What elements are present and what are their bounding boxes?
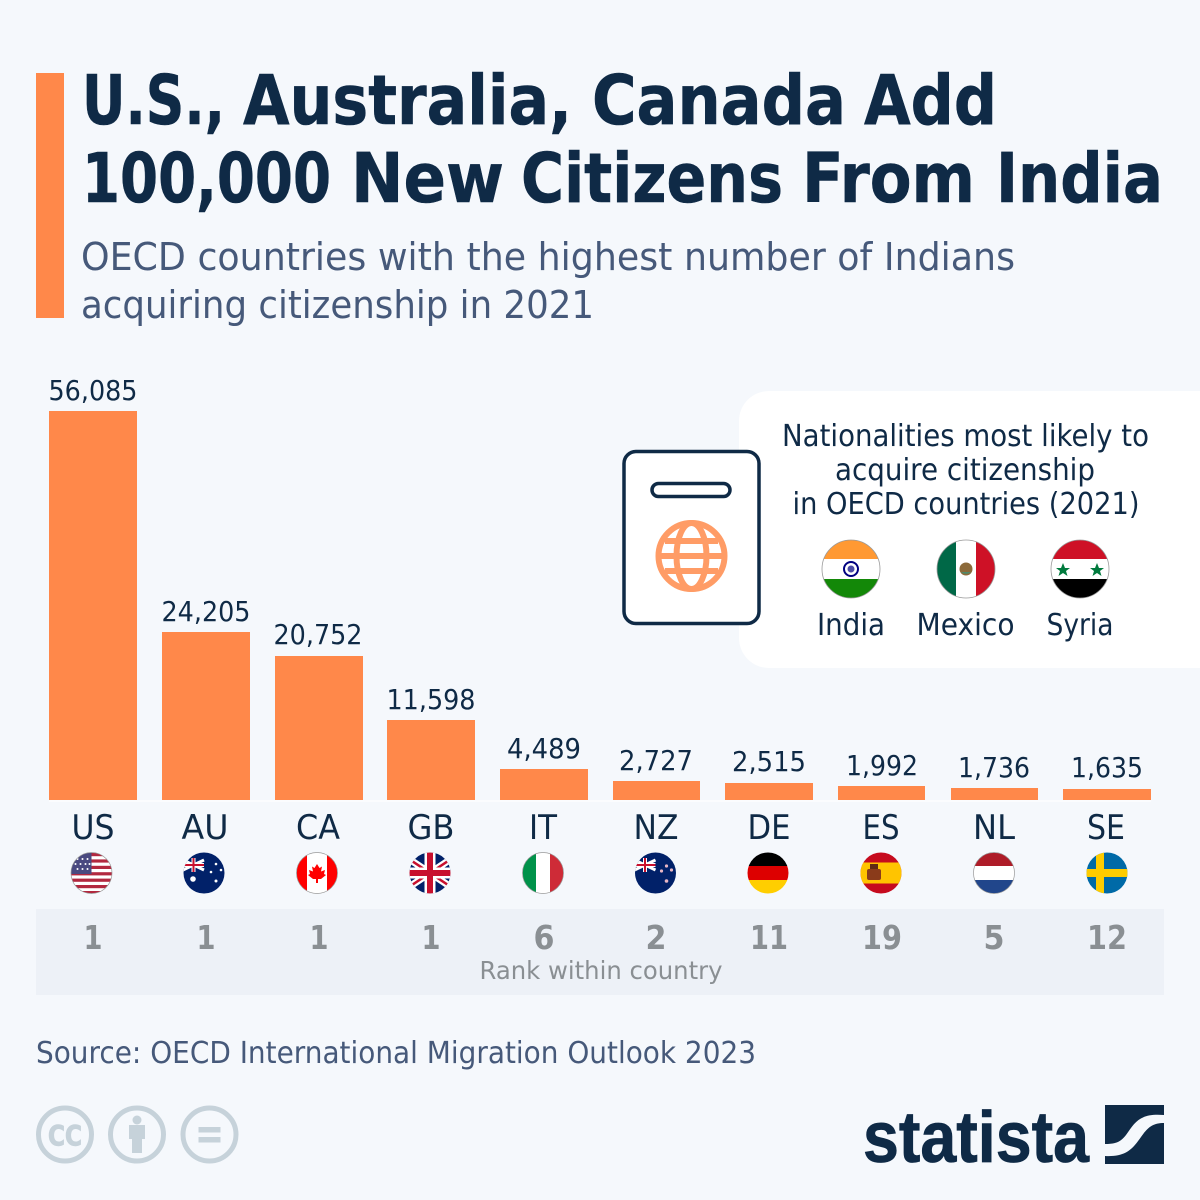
title: Add xyxy=(864,61,997,141)
flag labels: India xyxy=(817,608,885,643)
rank numbers: 2 xyxy=(646,918,666,957)
panel heading: Nationalities most likely to xyxy=(782,419,1149,454)
bars xyxy=(49,411,1151,800)
value labels: 1,992 xyxy=(846,750,918,782)
value labels: 1,736 xyxy=(958,752,1030,784)
value labels: 4,489 xyxy=(507,733,581,765)
title xyxy=(82,61,1163,219)
icon: statista mark xyxy=(1105,1105,1164,1164)
title: From xyxy=(802,139,975,219)
title: Canada xyxy=(592,61,846,141)
flag: US xyxy=(70,852,112,894)
country codes: SE xyxy=(1087,808,1125,848)
flag: India xyxy=(821,539,881,599)
value labels: 24,205 xyxy=(162,596,250,628)
icon: passport xyxy=(624,452,759,624)
flag: Sweden xyxy=(1086,852,1128,894)
title: Citizens xyxy=(521,139,783,219)
flag: Syria xyxy=(1050,539,1110,599)
flag labels: Mexico xyxy=(916,608,1014,643)
flag: New Zealand xyxy=(634,852,676,894)
value labels: 56,085 xyxy=(48,375,138,407)
value labels: 1,635 xyxy=(1071,752,1143,784)
rank numbers: 11 xyxy=(750,918,788,957)
country codes: NL xyxy=(973,808,1015,848)
country codes: DE xyxy=(748,808,790,848)
panel heading: in OECD countries (2021) xyxy=(792,487,1140,522)
flag: Canada xyxy=(296,852,338,894)
rank numbers xyxy=(84,918,1127,957)
title: U.S., xyxy=(82,61,225,141)
title accent bar xyxy=(36,73,64,318)
title: New xyxy=(351,139,504,219)
rank numbers: 19 xyxy=(862,918,902,957)
rank numbers: 1 xyxy=(196,918,216,957)
title: India xyxy=(996,139,1163,219)
flag: Australia xyxy=(183,852,225,894)
value labels: 2,727 xyxy=(619,745,693,777)
icon: creative commons xyxy=(38,1108,236,1161)
flag: Germany xyxy=(747,852,789,894)
baseline xyxy=(49,800,1151,802)
rank numbers: 12 xyxy=(1087,918,1127,957)
country codes: AU xyxy=(182,808,228,848)
source: Source: OECD International Migration Outlook 2023 xyxy=(36,1036,756,1071)
rank numbers: 1 xyxy=(310,918,328,957)
subtitle: OECD countries with the highest number of Indians xyxy=(81,235,1015,279)
icon: creative commons: CC xyxy=(48,1119,82,1152)
title: 100,000 xyxy=(82,139,331,219)
rank panel xyxy=(36,909,1164,995)
panel heading xyxy=(782,419,1149,522)
flag labels xyxy=(817,608,1114,643)
rank numbers: 1 xyxy=(84,918,102,957)
icon: globe xyxy=(658,523,724,589)
country codes: CA xyxy=(296,808,340,848)
logo: statista: statista xyxy=(863,1098,1090,1178)
panel heading: acquire citizenship xyxy=(835,453,1095,488)
flag: Spain xyxy=(860,852,902,894)
value labels: 11,598 xyxy=(386,684,476,716)
country codes: GB xyxy=(408,808,454,848)
subtitle: acquiring citizenship in 2021 xyxy=(81,283,594,327)
subtitle xyxy=(81,235,1015,327)
title: Australia, xyxy=(243,61,572,141)
flag: Netherlands xyxy=(973,852,1015,894)
panel: nationalities xyxy=(739,391,1200,668)
value labels: 2,515 xyxy=(732,746,806,778)
country codes: NZ xyxy=(634,808,678,848)
rank numbers: 5 xyxy=(984,918,1004,957)
value labels: 20,752 xyxy=(274,619,362,651)
flag labels: Syria xyxy=(1046,608,1114,643)
country codes xyxy=(72,808,1125,848)
flag: UK xyxy=(409,852,451,894)
flag: Mexico xyxy=(936,539,996,599)
value labels xyxy=(48,375,1143,784)
rank numbers: 6 xyxy=(534,918,554,957)
country codes: ES xyxy=(862,808,900,848)
flag: Italy xyxy=(522,852,564,894)
rank caption: Rank within country xyxy=(480,956,723,985)
country codes: IT xyxy=(529,808,557,848)
bar chart xyxy=(48,375,1151,848)
country codes: US xyxy=(72,808,114,848)
rank numbers: 1 xyxy=(422,918,440,957)
